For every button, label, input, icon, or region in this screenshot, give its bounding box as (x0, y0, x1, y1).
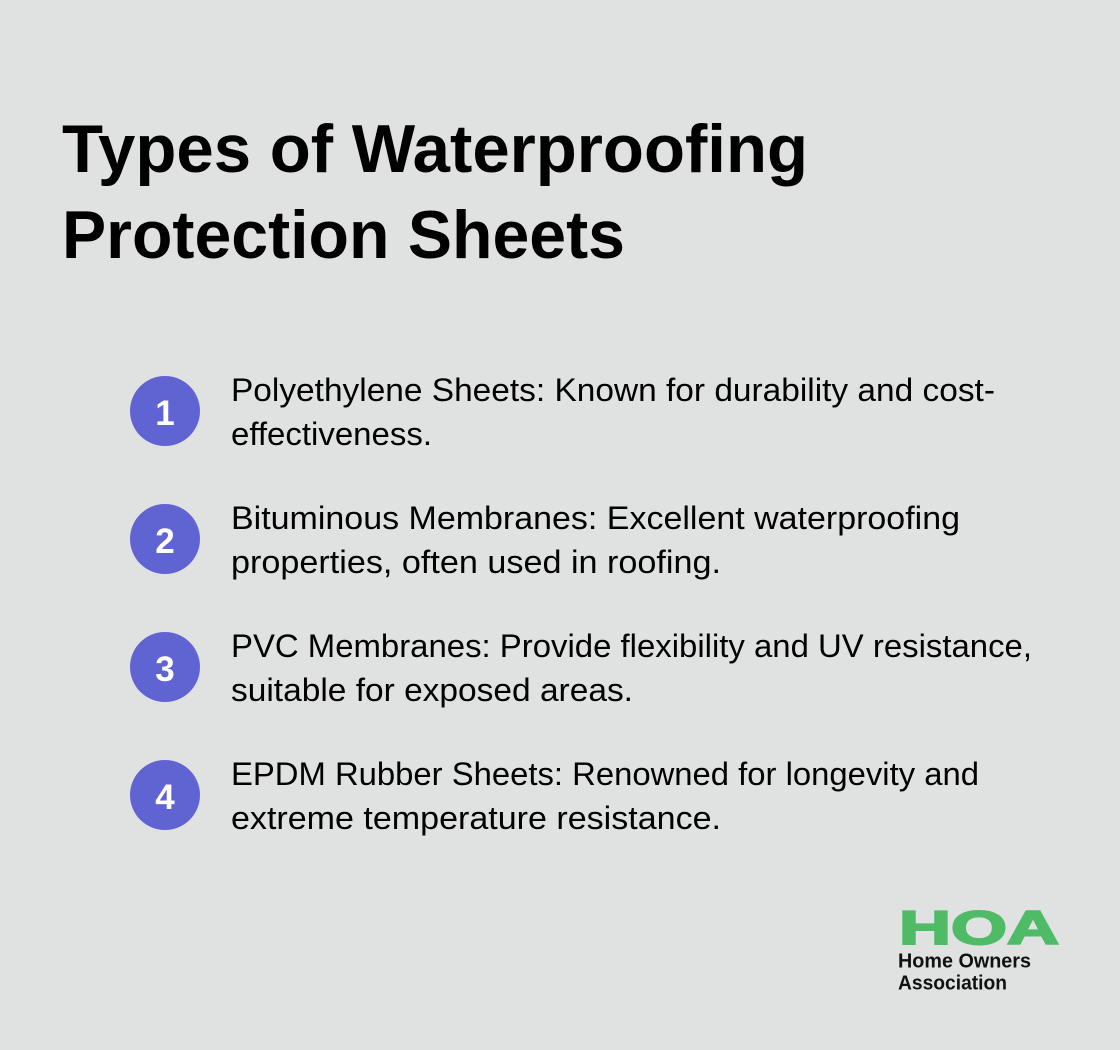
item 1 text: Polyethylene Sheets: Known for durability and cost- (231, 372, 995, 408)
list item 2 (130, 500, 960, 580)
list item 1 (130, 372, 995, 452)
number badge 1 (130, 376, 200, 446)
title: Protection Sheets (62, 197, 625, 273)
list item 4 (130, 756, 979, 836)
item 3 text: PVC Membranes: Provide flexibility and UV resistance, (231, 628, 1032, 664)
logo: HOA Home Owners Association: Association (898, 972, 1007, 994)
item 3 text: suitable for exposed areas. (231, 672, 633, 708)
number badge 3: 3 (155, 650, 175, 689)
logo: HOA Home Owners Association (898, 901, 1059, 994)
title (62, 111, 808, 273)
number badge 4: 4 (155, 778, 175, 817)
item 4 text: extreme temperature resistance. (231, 800, 721, 836)
item 2 text: Bituminous Membranes: Excellent waterproofing (231, 500, 960, 536)
number badge 2 (130, 504, 200, 574)
item 1 text (231, 372, 995, 452)
list item 3 (130, 628, 1032, 708)
logo: HOA Home Owners Association: HOA (899, 901, 1059, 954)
title: Types of Waterproofing (62, 111, 808, 187)
item 3 text (231, 628, 1032, 708)
item 4 text (231, 756, 979, 836)
number badge 2: 2 (155, 522, 175, 561)
item 1 text: effectiveness. (231, 416, 432, 452)
logo: HOA Home Owners Association: Home Owners (898, 950, 1031, 972)
item 4 text: EPDM Rubber Sheets: Renowned for longevity and (231, 756, 979, 792)
number badge 3 (130, 632, 200, 702)
item 2 text: properties, often used in roofing. (231, 544, 721, 580)
item 2 text (231, 500, 960, 580)
number badge 4 (130, 760, 200, 830)
number badge 1: 1 (155, 394, 175, 433)
